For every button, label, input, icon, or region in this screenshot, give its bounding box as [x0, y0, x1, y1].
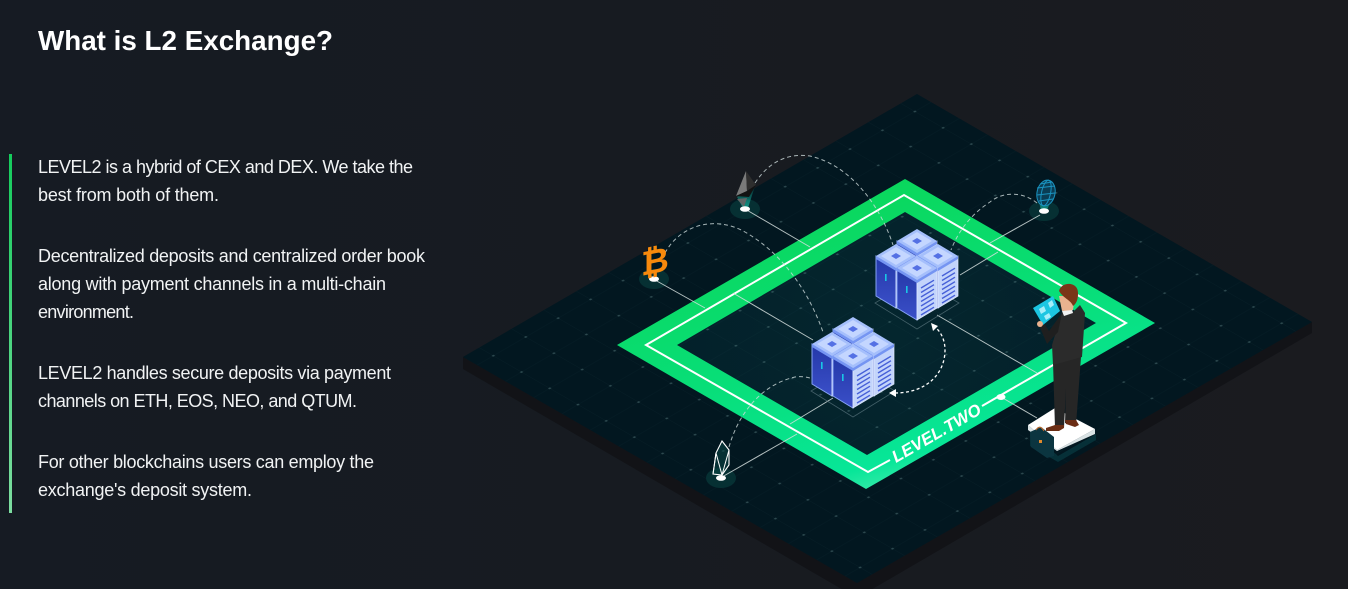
icon: bitcoin node: ₿: [641, 239, 669, 285]
legs: [1053, 357, 1081, 428]
paragraph: deposits: [38, 246, 426, 322]
paragraph: secure deposits: LEVEL2 handles secure deposits via payment: [38, 363, 391, 383]
paragraph: hybrid: LEVEL2 is a hybrid of CEX and DEX. We take the: [38, 157, 413, 177]
paragraph: secure deposits: channels on ETH, EOS, NEO, and QTUM.: [38, 391, 357, 411]
paragraph: other blockchains: For other blockchains users can employ the: [38, 452, 374, 472]
platform: [463, 94, 1312, 583]
shirt collar: [1062, 309, 1073, 316]
ring node: [996, 394, 1006, 400]
white ring line: [646, 195, 1126, 472]
server cluster: lower: [811, 317, 895, 417]
shoes: [1046, 420, 1079, 431]
jacket: [1052, 305, 1085, 365]
arm: [1039, 313, 1062, 344]
briefcase: [1030, 427, 1054, 458]
text block: description: [38, 157, 426, 500]
curved arrow between clusters: [889, 323, 945, 397]
head: [1059, 296, 1075, 311]
connection lines: [655, 209, 1040, 477]
paragraph: deposits: Decentralized deposits and centralized order book: [38, 246, 426, 266]
title: What is L2 Exchange?: [38, 25, 333, 56]
paragraph: hybrid: [38, 157, 413, 205]
accent bar: [9, 154, 12, 513]
paragraph: deposits: along with payment channels in a multi-chain: [38, 274, 386, 294]
node halos: [639, 199, 1059, 488]
ring label: LEVEL.TWO: LEVEL.TWO: [888, 400, 985, 466]
paragraph: other blockchains: [38, 452, 374, 500]
hand: [1037, 321, 1043, 327]
platform shadow: [463, 322, 1312, 589]
dashed arcs: [665, 155, 1037, 447]
server cluster: upper: [875, 229, 959, 329]
paragraph: deposits: environment.: [38, 302, 134, 322]
icon: eos node: [713, 441, 729, 481]
icon: ethereum node: [736, 171, 756, 212]
isometric illustration: [463, 94, 1312, 589]
green ring: [617, 179, 1155, 489]
tablet: [1033, 296, 1060, 325]
hair: [1059, 284, 1078, 306]
paragraph: other blockchains: exchange's deposit system.: [38, 480, 252, 500]
person on pedestal: [1028, 284, 1096, 462]
paragraph: secure deposits: [38, 363, 391, 411]
pedestal: [1028, 408, 1096, 462]
icon: neo node: [1034, 178, 1058, 214]
paragraph: hybrid: best from both of them.: [38, 185, 219, 205]
